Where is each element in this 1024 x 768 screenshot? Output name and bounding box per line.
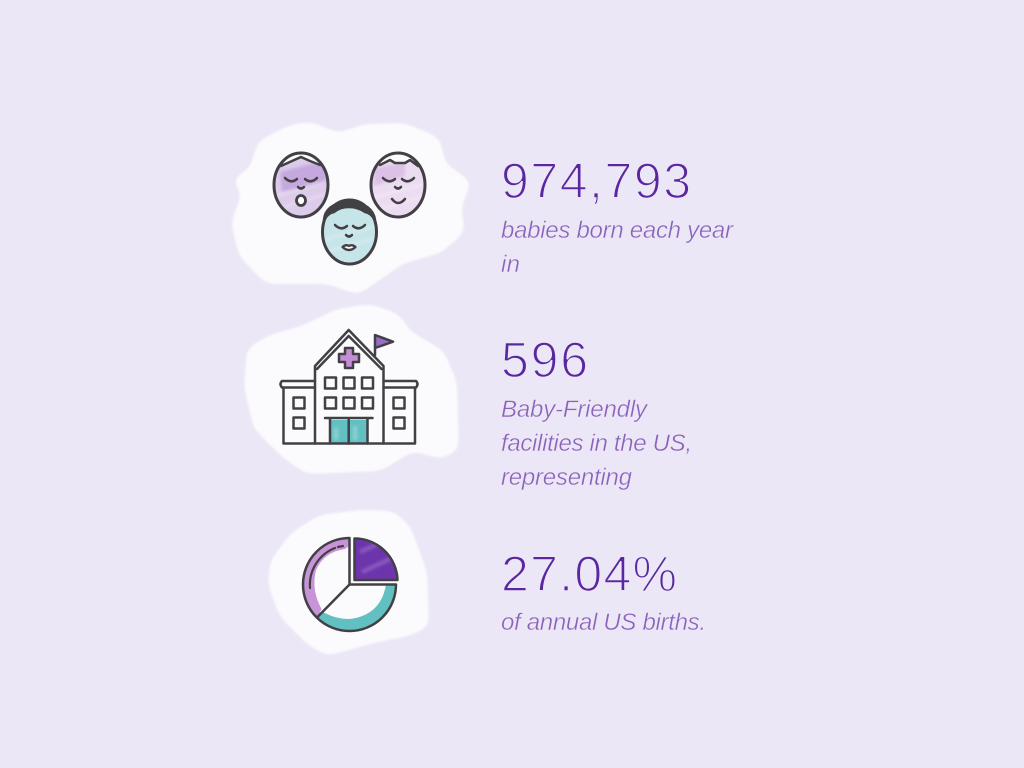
baby face: left [272, 152, 330, 218]
pie: teal band [318, 584, 396, 630]
hospital roof bars [280, 381, 418, 388]
hospital main block [315, 330, 384, 444]
caption: Baby-Friendly facilities in the US, representing [501, 396, 692, 491]
icon: pie chart [268, 510, 429, 656]
icon: three baby faces [231, 122, 472, 295]
flag [375, 335, 393, 355]
pie: lilac band [304, 538, 349, 618]
caption: of annual US births: of annual US births. [501, 609, 706, 636]
door frame [325, 418, 372, 444]
caption: babies born each year in: in [501, 251, 520, 278]
stat: 974,793: 974,793 [501, 153, 691, 209]
stat: 27.04%: 27.04% [501, 546, 677, 602]
stat: 596: 596 [501, 332, 588, 388]
pie: purple slice [354, 538, 398, 580]
pie: inner dash [310, 546, 343, 588]
baby face: right [370, 152, 426, 218]
caption: babies born each year in: babies born each year [501, 217, 734, 244]
caption: Baby-Friendly facilities in the US, representing: representing [501, 464, 633, 491]
cross [339, 348, 359, 368]
row: babies born [231, 122, 734, 295]
baby face: front [320, 198, 380, 268]
caption: Baby-Friendly facilities in the US, representing: facilities in the US, [501, 430, 692, 457]
row: Baby-Friendly facilities [244, 304, 692, 491]
caption: Baby-Friendly facilities in the US, representing: Baby-Friendly [501, 396, 649, 423]
row: percent of births [268, 510, 706, 656]
icon: hospital building [244, 304, 459, 474]
pie: outline [303, 538, 396, 631]
caption: babies born each year in [501, 217, 734, 278]
hospital doors [330, 420, 368, 444]
hospital wings [284, 388, 415, 444]
windows [294, 378, 404, 428]
